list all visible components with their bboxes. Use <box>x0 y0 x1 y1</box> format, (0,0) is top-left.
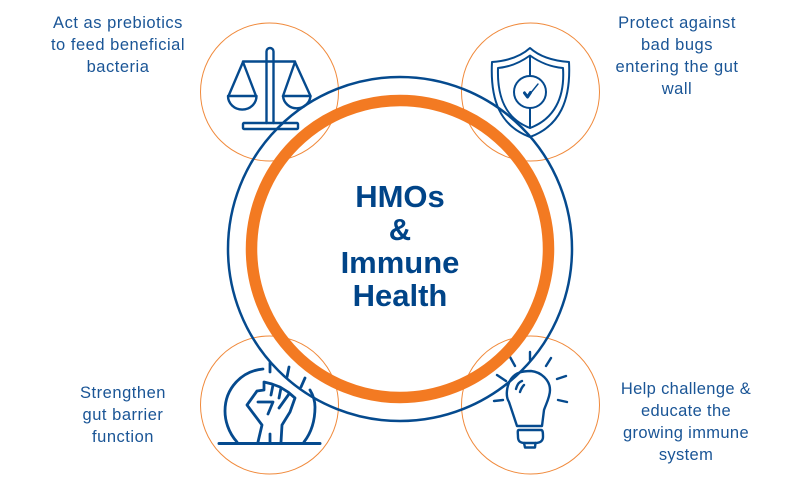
text: gut barrier benefit: Strengthen <box>80 384 166 402</box>
icon: balance scales <box>228 48 310 129</box>
text: prebiotics benefit: bacteria <box>87 58 149 76</box>
title: Immune <box>341 245 459 280</box>
text: protection benefit: wall <box>662 80 692 98</box>
text: immune education benefit: system <box>659 446 713 464</box>
text: prebiotics benefit: to feed beneficial <box>51 36 185 54</box>
text: prebiotics benefit: Act as prebiotics <box>53 14 183 32</box>
circle: top right outline <box>462 23 600 161</box>
ring: orange inner circle <box>252 100 548 398</box>
text: protection benefit: Protect against <box>618 14 736 32</box>
text: protection benefit: bad bugs <box>641 36 713 54</box>
text: immune education benefit: Help challenge & <box>621 380 751 398</box>
circle: bottom left outline <box>200 336 338 474</box>
icon: raised fist <box>219 363 320 444</box>
text: immune education benefit: growing immune <box>623 424 749 442</box>
title: HMOs <box>355 179 445 214</box>
icon: shield with check mark <box>492 48 569 137</box>
text: protection benefit: entering the gut <box>616 58 738 76</box>
title: & <box>389 212 411 247</box>
text: immune education benefit: educate the <box>641 402 731 420</box>
text: gut barrier benefit: gut barrier <box>83 406 163 424</box>
circle: bottom right outline <box>462 336 600 474</box>
text: prebiotics benefit <box>51 14 185 76</box>
title: Health <box>353 278 447 313</box>
text: gut barrier benefit: function <box>92 428 154 446</box>
icon: light bulb with rays <box>494 352 567 448</box>
text: gut barrier benefit <box>80 384 166 446</box>
circle: top left outline <box>200 23 338 161</box>
text: protection benefit <box>616 14 738 98</box>
text: immune education benefit <box>621 380 751 464</box>
title <box>341 179 459 313</box>
ring: navy outer circle <box>228 77 572 421</box>
